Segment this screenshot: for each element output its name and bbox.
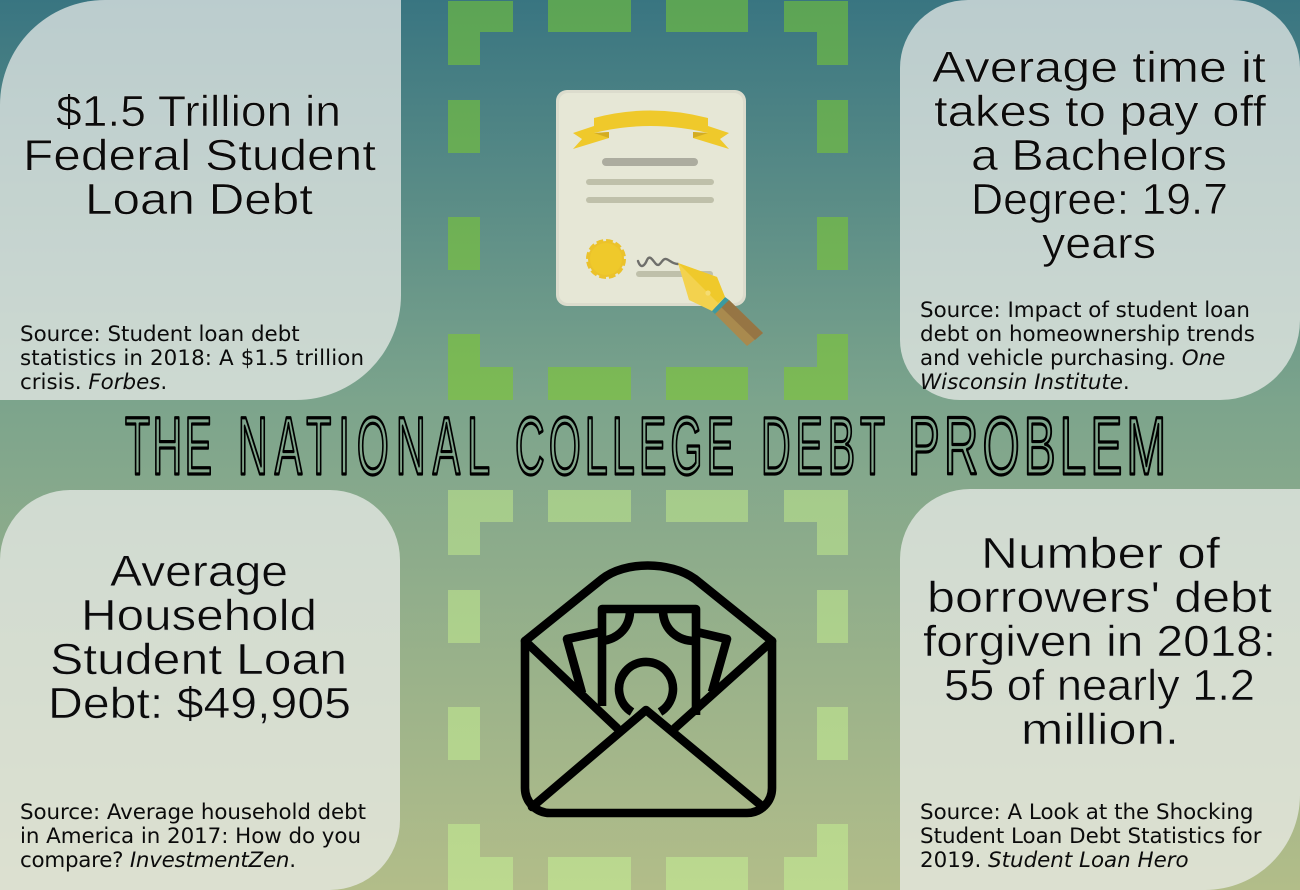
icon: envelope with money (525, 566, 772, 813)
source: InvestmentZen (20, 800, 366, 873)
panel shape (0, 0, 401, 400)
heading: household debt: Debt: $49,905 (48, 679, 351, 728)
heading: forgiven borrowers: Number of (981, 529, 1221, 578)
bill (602, 609, 696, 715)
heading: household debt: Household (81, 591, 317, 640)
bill circle (619, 662, 673, 712)
heading: total debt: Loan Debt (85, 175, 313, 224)
panel: average household debt (0, 490, 400, 890)
panel: average payoff time (900, 0, 1300, 400)
title: THE (125, 399, 212, 492)
source: One Wisconsin Institute: debt on homeownership trends (920, 322, 1255, 347)
heading: payoff time: takes to pay off (934, 87, 1267, 136)
ribbon (573, 110, 729, 149)
inner flap lines (525, 641, 772, 728)
source: Forbes: Source: Student loan debt (20, 322, 300, 347)
source: One Wisconsin Institute: and vehicle purchasing. One (920, 346, 1225, 371)
source: Student Loan Hero: Source: A Look at the Shocking (920, 800, 1253, 825)
title (125, 399, 1166, 492)
panel shape (900, 0, 1300, 400)
heading: household debt (48, 547, 351, 728)
heading: payoff time (932, 43, 1267, 268)
source: One Wisconsin Institute: Source: Impact of student loan (920, 298, 1250, 323)
icon: diploma with pen (556, 90, 763, 346)
pen (678, 263, 763, 346)
title: NATIONAL (238, 399, 490, 492)
heading: forgiven borrowers: 55 of nearly 1.2 (944, 661, 1255, 710)
source: Student Loan Hero (920, 800, 1262, 873)
bill corners (598, 612, 695, 641)
text lines (586, 158, 714, 277)
heading: total debt: Federal Student (23, 131, 376, 180)
dashed frame: bottom (448, 490, 848, 890)
heading: forgiven borrowers: million. (1021, 705, 1179, 754)
dashed frame: top (448, 0, 848, 400)
source: Forbes: crisis. Forbes. (20, 370, 167, 395)
heading: household debt: Average (110, 547, 288, 596)
heading: payoff time: a Bachelors (971, 131, 1227, 180)
panel: debt forgiveness (900, 489, 1300, 890)
signature (638, 258, 678, 266)
heading: payoff time: Degree: 19.7 (971, 175, 1228, 224)
heading: forgiven borrowers: borrowers' debt (927, 573, 1272, 622)
source: InvestmentZen: Source: Average household debt (20, 800, 366, 825)
seal (588, 241, 624, 277)
source: Forbes (20, 322, 364, 395)
back bills (567, 632, 727, 693)
heading: total debt (23, 87, 376, 224)
source: InvestmentZen: in America in 2017: How do you (20, 824, 361, 849)
diploma sheet (556, 90, 746, 306)
panel shape (900, 489, 1300, 890)
envelope body and flap (525, 566, 772, 813)
heading: forgiven borrowers (923, 529, 1276, 754)
source: Forbes: statistics in 2018: A $1.5 trillion (20, 346, 364, 371)
heading: forgiven borrowers: forgiven in 2018: (923, 617, 1276, 666)
front flap (532, 710, 763, 807)
source: Student Loan Hero: 2019. Student Loan Hero (920, 848, 1189, 873)
source: One Wisconsin Institute (920, 298, 1255, 395)
panel shape (0, 490, 400, 890)
heading: total debt: $1.5 Trillion in (56, 87, 341, 136)
heading: payoff time: years (1042, 219, 1156, 268)
title: COLLEGE (515, 399, 734, 492)
title: PROBLEM (908, 401, 1166, 492)
heading: payoff time: Average time it (932, 43, 1266, 92)
title: DEBT (761, 399, 885, 492)
panel: total federal debt (0, 0, 401, 400)
source: Student Loan Hero: Student Loan Debt Statistics for (920, 824, 1262, 849)
source: One Wisconsin Institute: Wisconsin Institute. (920, 370, 1130, 395)
source: InvestmentZen: compare? InvestmentZen. (20, 848, 296, 873)
heading: household debt: Student Loan (50, 635, 347, 684)
